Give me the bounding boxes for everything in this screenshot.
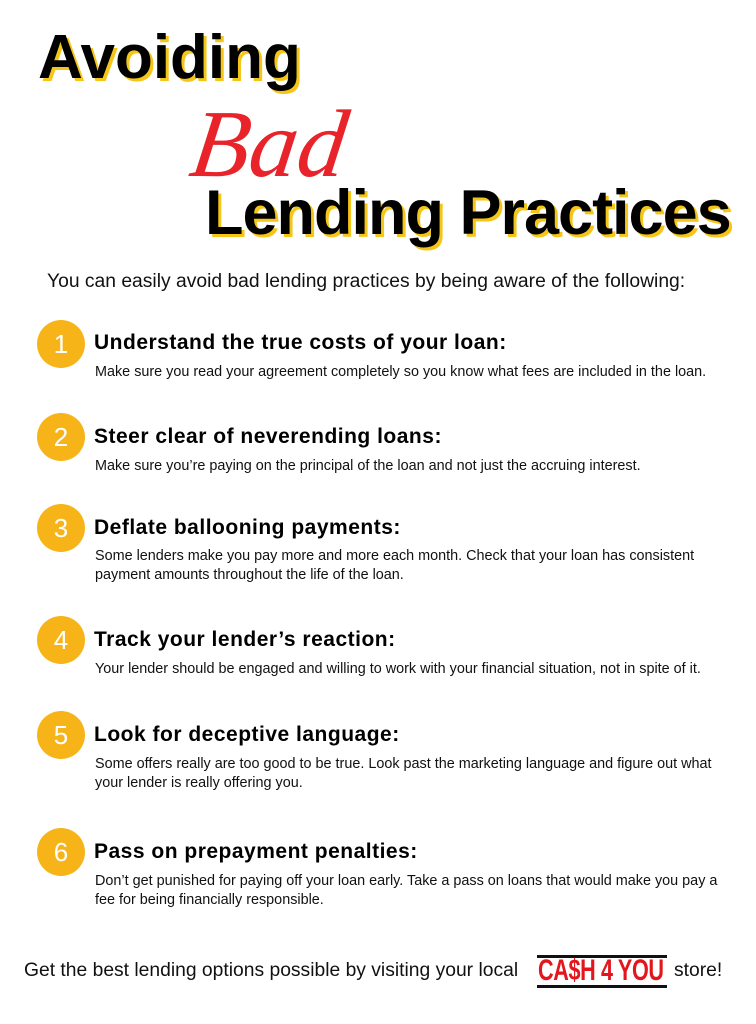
icon: number 5 <box>37 711 85 759</box>
footer <box>24 954 722 988</box>
heading 5: Look for deceptive language: <box>94 723 400 746</box>
title <box>38 23 732 250</box>
item 6 <box>37 828 718 908</box>
body 2: Make sure you’re paying on the principal of the loan and not just the accruing interest. <box>95 458 641 474</box>
icon: number 2 <box>37 413 85 461</box>
body 6: Don’t get punished for paying off your loan early. Take a pass on loans that would make you pay a fee for being financially responsible. <box>95 873 717 908</box>
icon: number 6 <box>37 828 85 876</box>
logo: Cash 4 You: CA$H 4 YOU <box>538 954 664 987</box>
title: Avoiding: Avoiding <box>38 23 301 92</box>
icon: number 1: 1 <box>54 329 68 359</box>
item 3 <box>37 504 694 583</box>
item 1 <box>37 320 706 380</box>
footer text: Get the best lending options possible by visiting your local <box>24 960 518 981</box>
icon: number 3: 3 <box>54 513 68 543</box>
title: Bad: Bad <box>184 90 354 197</box>
heading 3: Deflate ballooning payments: <box>94 516 401 539</box>
body 1: Make sure you read your agreement completely so you know what fees are included in the loan. <box>95 364 706 380</box>
icon: number 4 <box>37 616 85 664</box>
item 5 <box>37 711 712 791</box>
body 4: Your lender should be engaged and willing to work with your financial situation, not in spite of it. <box>95 661 701 677</box>
heading 4: Track your lender’s reaction: <box>94 628 396 651</box>
icon: number 4: 4 <box>54 625 68 655</box>
icon: number 1 <box>37 320 85 368</box>
icon: number 2: 2 <box>54 422 68 452</box>
item 4 <box>37 616 701 677</box>
heading 6: Pass on prepayment penalties: <box>94 840 418 863</box>
heading 1: Understand the true costs of your loan: <box>94 331 507 354</box>
icon: number 5: 5 <box>54 720 68 750</box>
intro text: You can easily avoid bad lending practices by being aware of the following: <box>47 271 685 292</box>
item 2 <box>37 413 641 474</box>
footer text end: store! <box>674 960 722 981</box>
icon: number 6: 6 <box>54 837 68 867</box>
heading 2: Steer clear of neverending loans: <box>94 425 442 448</box>
body 5: Some offers really are too good to be true. Look past the marketing language and figure out what your lender is really offering you. <box>95 756 712 791</box>
icon: number 3 <box>37 504 85 552</box>
title: Lending Practices: Lending Practices <box>205 178 731 248</box>
body 3: Some lenders make you pay more and more each month. Check that your loan has consistent payment amounts throughout the life of the loan. <box>95 548 694 583</box>
